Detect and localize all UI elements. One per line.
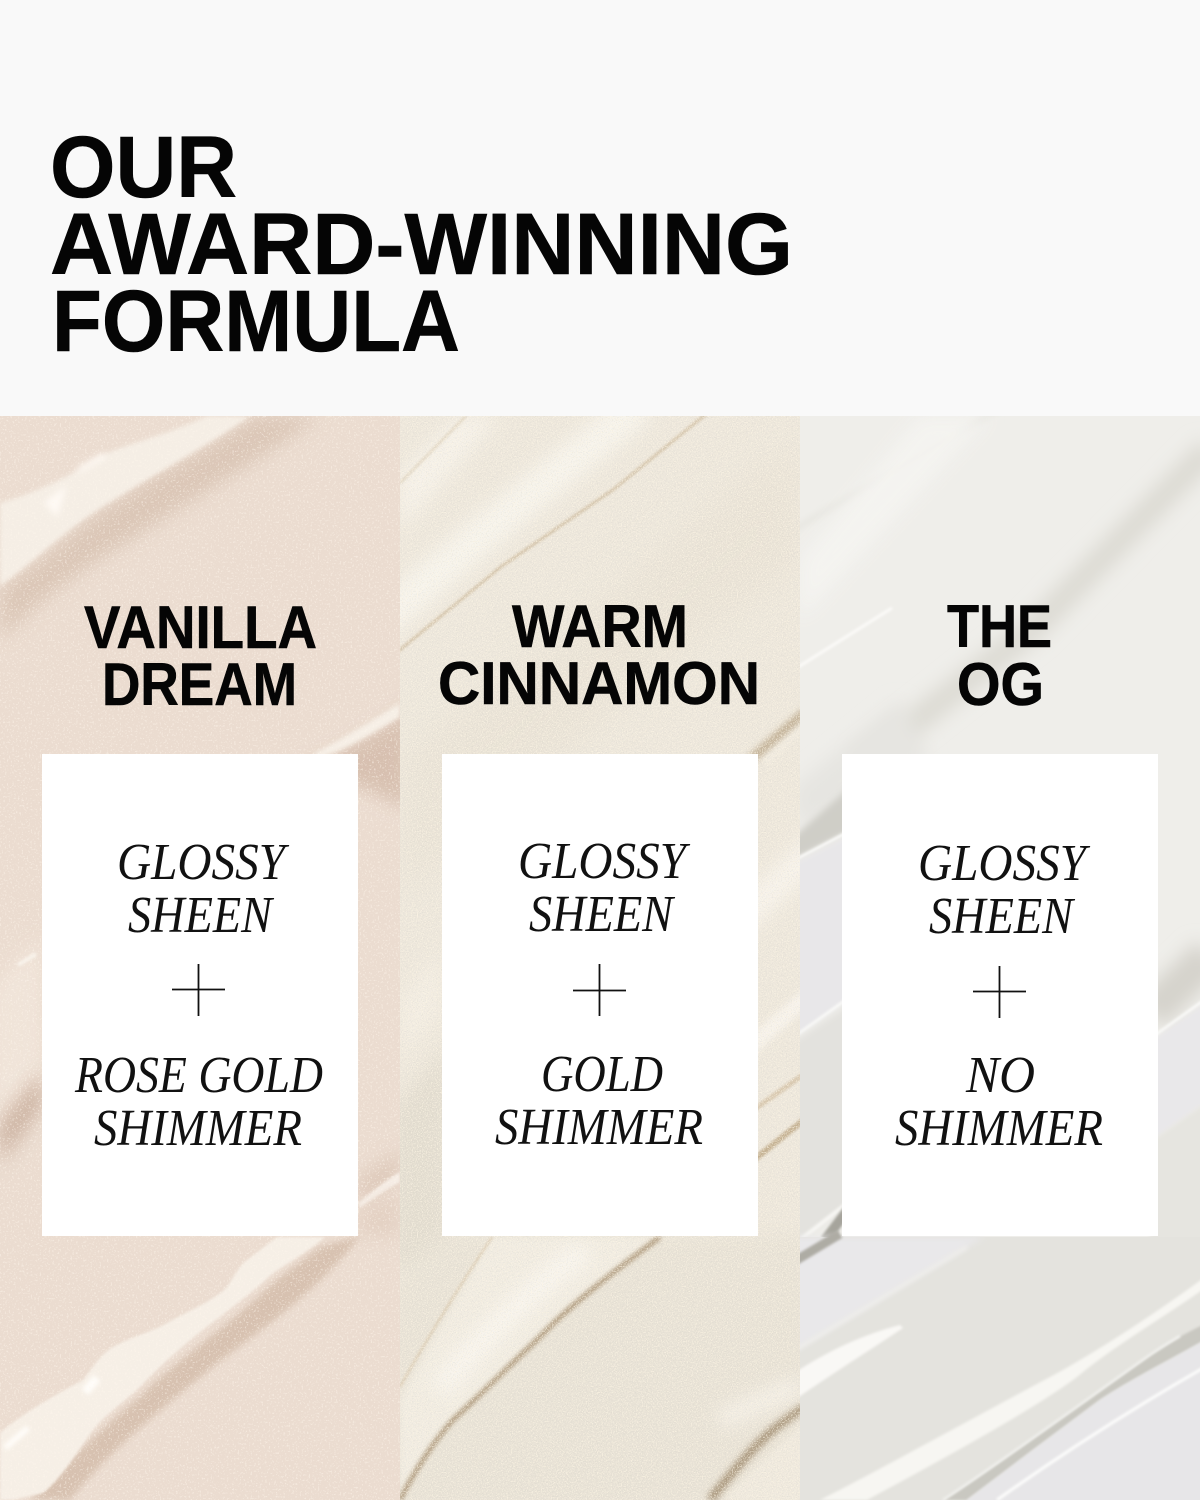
icon: plus	[973, 966, 1026, 1018]
heading: warm cinnamon: WARM	[512, 593, 688, 660]
title: FORMULA	[52, 273, 460, 370]
header background	[0, 0, 1200, 416]
text: glossy sheen: SHEEN	[128, 887, 275, 944]
cream swatch: vanilla dream texture	[0, 416, 410, 1500]
panel: the og	[790, 408, 1200, 1500]
cream swatch: the og texture	[790, 408, 1200, 1500]
heading: warm cinnamon: CINNAMON	[438, 650, 760, 717]
title: OUR	[50, 119, 237, 216]
heading: vanilla dream: VANILLA	[84, 594, 317, 661]
text: glossy sheen: GLOSSY	[918, 835, 1091, 892]
text: gold shimmer: GOLD	[541, 1046, 663, 1103]
text: gold shimmer: SHIMMER	[495, 1099, 703, 1156]
text: glossy sheen: GLOSSY	[117, 834, 290, 891]
heading: the og: OG	[957, 651, 1044, 718]
text: rose gold shimmer: ROSE GOLD	[74, 1047, 323, 1104]
cream swatch: warm cinnamon texture	[400, 416, 800, 1500]
text: rose gold shimmer	[74, 1047, 323, 1157]
panel: warm cinnamon	[400, 416, 800, 1500]
text: glossy sheen: SHEEN	[929, 888, 1076, 945]
icon: plus	[573, 964, 626, 1016]
heading: the og: THE	[947, 593, 1052, 660]
title: AWARD-WINNING	[50, 196, 793, 293]
card: warm cinnamon formula	[442, 754, 758, 1236]
text: glossy sheen	[518, 833, 691, 943]
text: no shimmer: NO	[965, 1047, 1035, 1104]
card: vanilla dream formula	[42, 754, 358, 1236]
heading: the og	[947, 593, 1052, 718]
text: glossy sheen: GLOSSY	[518, 833, 691, 890]
heading: warm cinnamon	[438, 593, 760, 717]
text: gold shimmer	[495, 1046, 703, 1156]
panel: vanilla dream	[0, 416, 410, 1500]
text: glossy sheen	[117, 834, 290, 944]
text: glossy sheen: SHEEN	[529, 886, 676, 943]
text: glossy sheen	[918, 835, 1091, 945]
text: no shimmer	[895, 1047, 1103, 1157]
text: rose gold shimmer: SHIMMER	[94, 1100, 302, 1157]
heading: vanilla dream	[84, 594, 317, 718]
card: the og formula	[842, 754, 1158, 1236]
icon: plus	[172, 964, 225, 1016]
text: no shimmer: SHIMMER	[895, 1100, 1103, 1157]
heading: vanilla dream: DREAM	[102, 651, 297, 718]
title	[50, 119, 793, 370]
